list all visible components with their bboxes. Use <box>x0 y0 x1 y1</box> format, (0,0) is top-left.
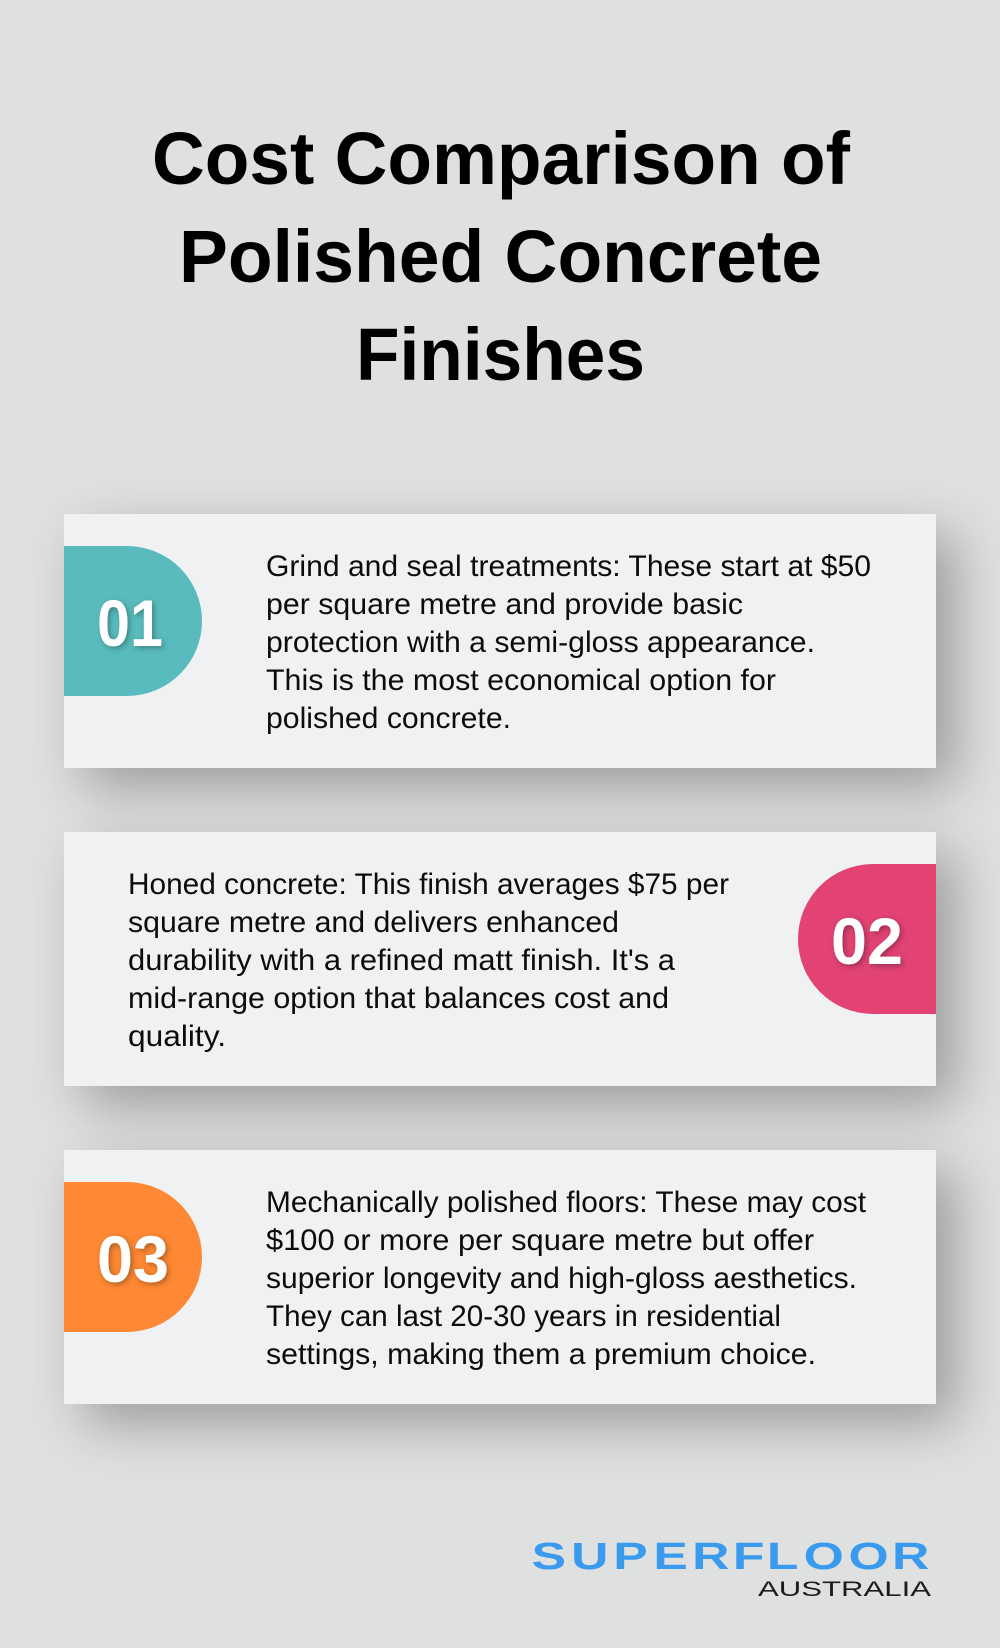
text: grind and seal: per square metre and provide basic <box>266 588 743 621</box>
panel: card 02 honed concrete <box>64 832 936 1086</box>
text: grind and seal: polished concrete. <box>266 702 511 735</box>
text: grind and seal: Grind and seal treatments: These start at $50 <box>266 550 871 583</box>
text: honed concrete: mid-range option that balances cost and <box>128 982 669 1015</box>
text: honed concrete: quality. <box>128 1020 226 1053</box>
text: honed concrete: durability with a refined matt finish. It's a <box>128 944 675 977</box>
badge 01: 01 <box>97 586 163 660</box>
badge 01 <box>64 546 202 696</box>
badge 03 <box>64 1182 202 1332</box>
title: Cost Comparison of <box>152 117 850 200</box>
text: grind and seal <box>266 550 871 735</box>
title: Polished Concrete <box>179 215 822 298</box>
text: honed concrete: square metre and delivers enhanced <box>128 906 619 939</box>
text: mechanically polished: superior longevity and high-gloss aesthetics. <box>266 1262 857 1295</box>
badge 02 <box>798 864 936 1014</box>
badge 03: 03 <box>97 1222 169 1296</box>
text: honed concrete <box>128 868 729 1053</box>
title <box>152 117 850 396</box>
text: mechanically polished <box>266 1186 867 1371</box>
badge 02: 02 <box>831 904 903 978</box>
text: mechanically polished: They can last 20-30 years in residential <box>266 1300 781 1333</box>
text: mechanically polished: settings, making them a premium choice. <box>266 1338 816 1371</box>
text: grind and seal: protection with a semi-gloss appearance. <box>266 626 815 659</box>
logo: Superfloor Australia: SUPERFLOOR <box>532 1535 929 1577</box>
panel: card 01 grind and seal <box>64 514 936 768</box>
logo: Superfloor Australia: AUSTRALIA <box>758 1578 931 1601</box>
text: mechanically polished: Mechanically polished floors: These may cost <box>266 1186 867 1219</box>
text: grind and seal: This is the most economical option for <box>266 664 776 697</box>
text: mechanically polished: $100 or more per square metre but offer <box>266 1224 814 1257</box>
text: honed concrete: Honed concrete: This finish averages $75 per <box>128 868 729 901</box>
title: Finishes <box>356 313 645 396</box>
panel: card 03 mechanically polished <box>64 1150 936 1404</box>
